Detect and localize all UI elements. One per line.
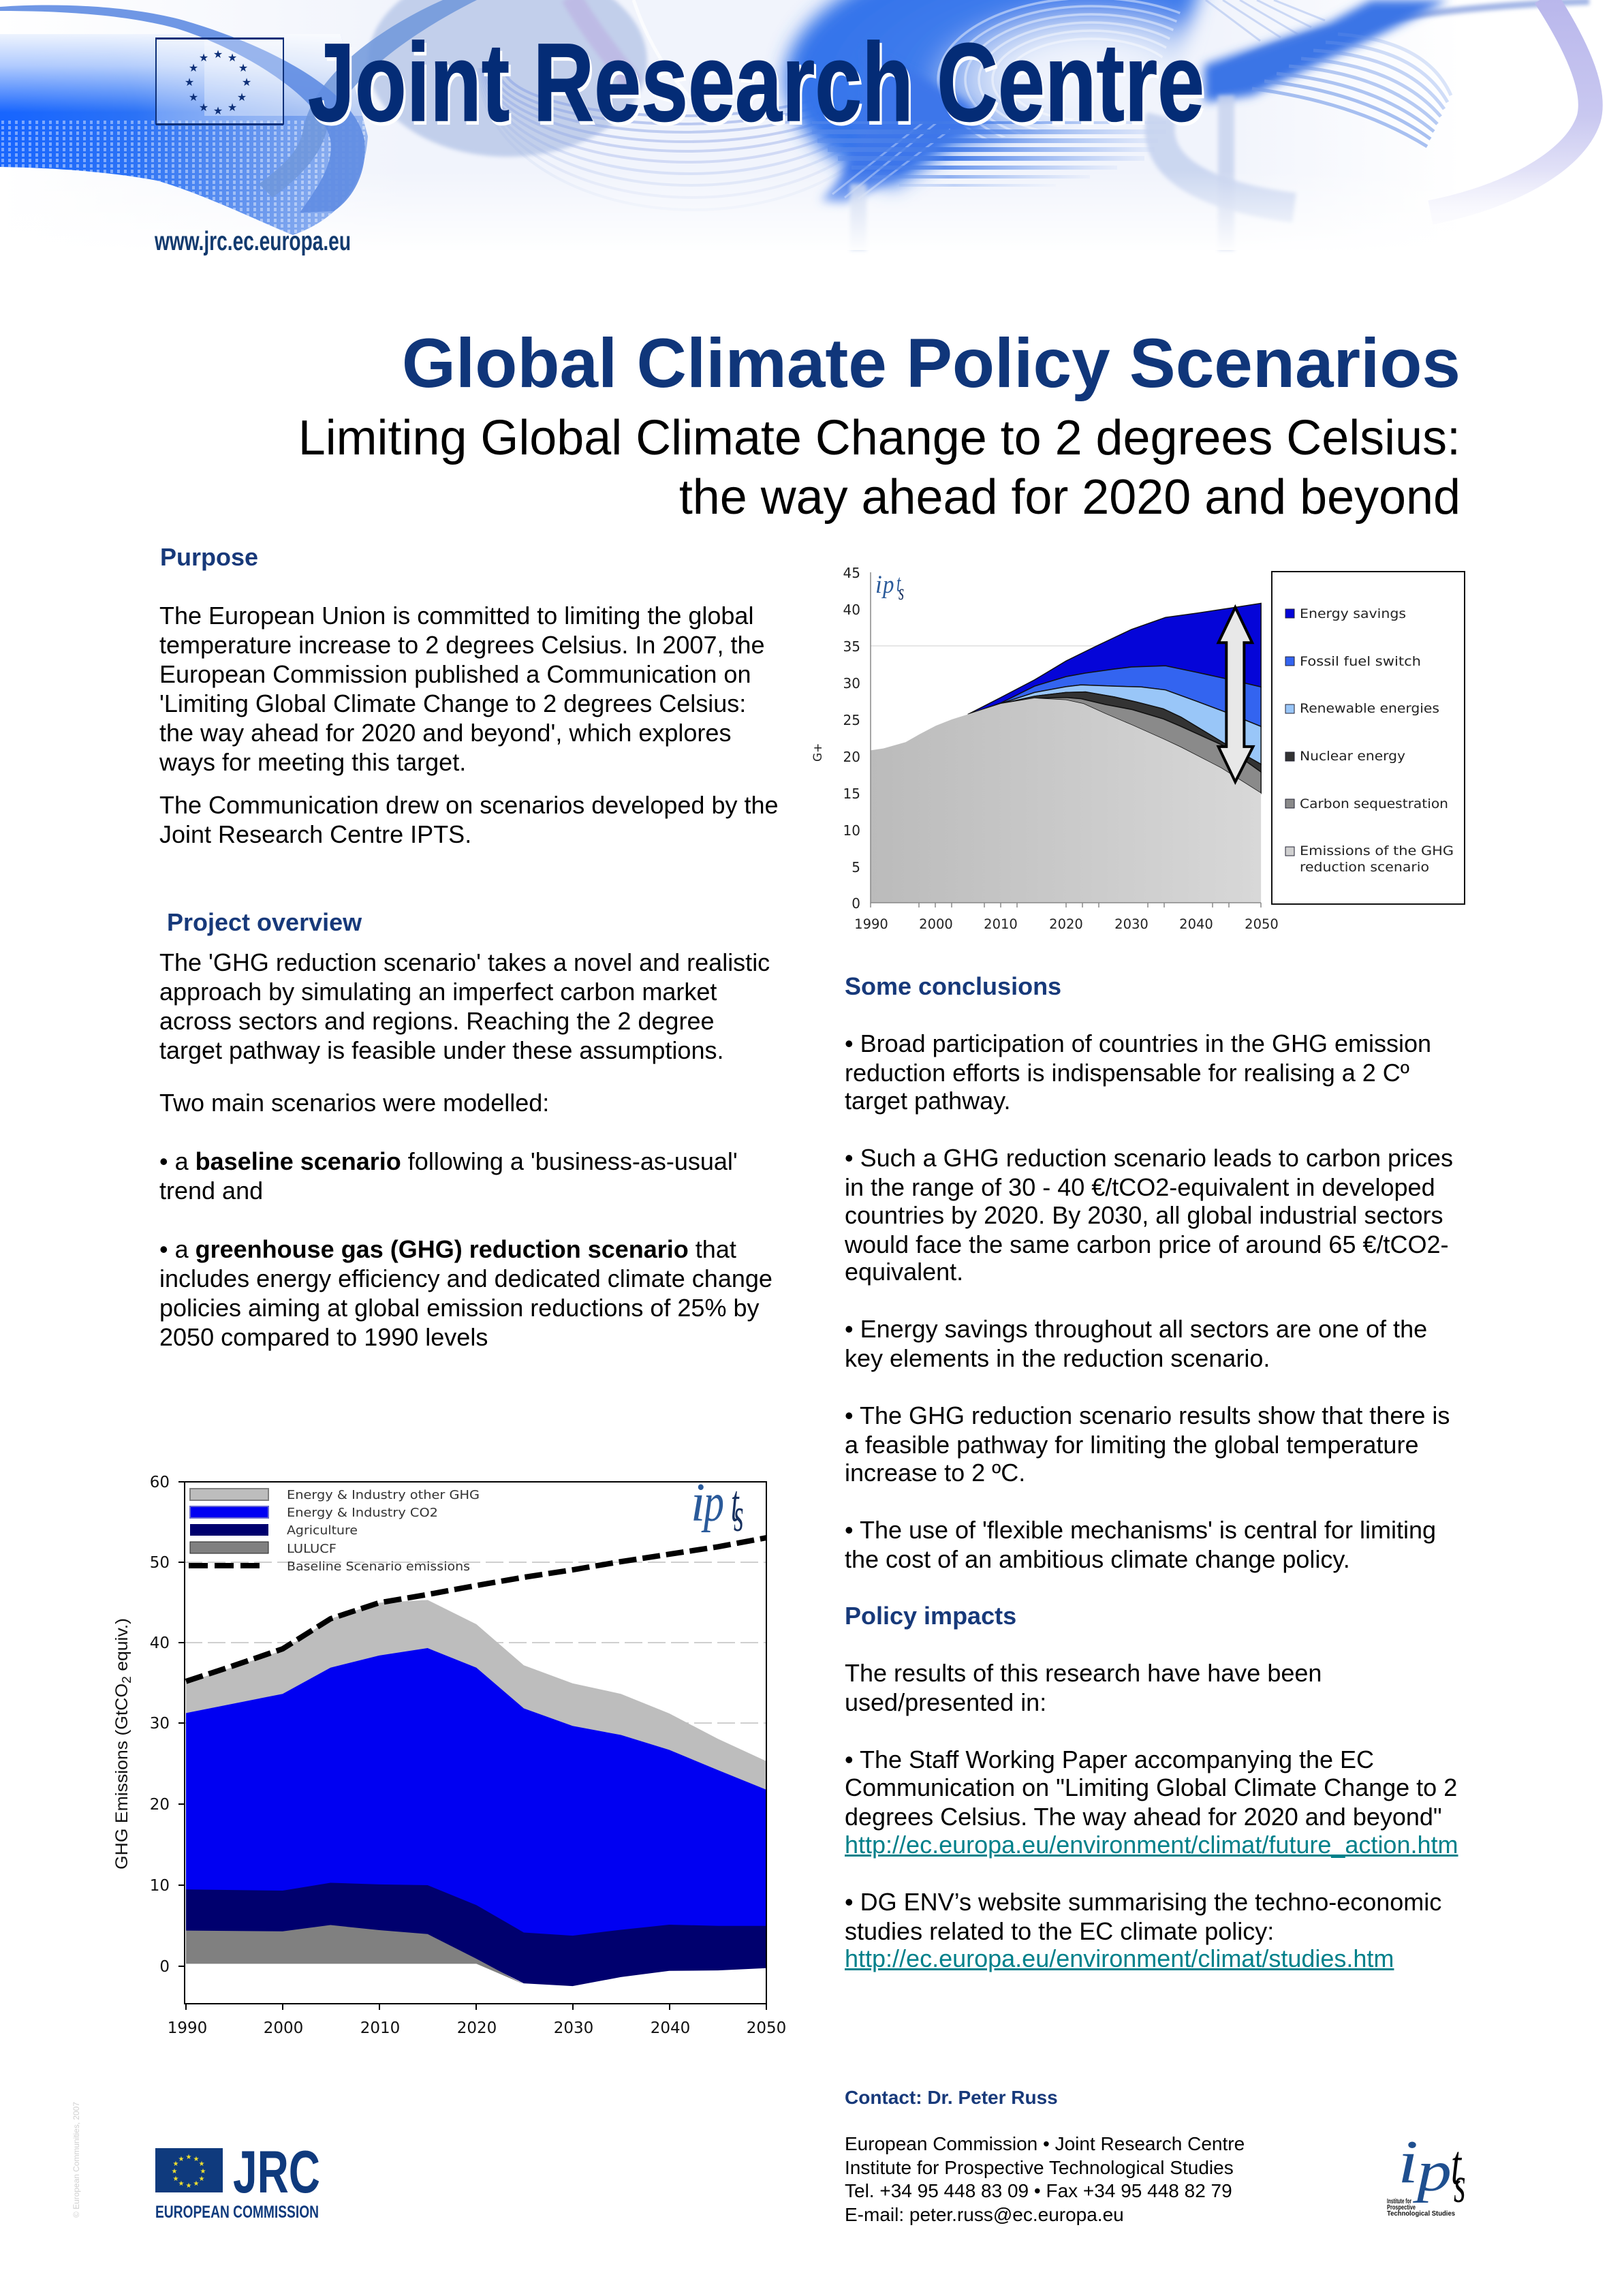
- contact details: European Commission • Joint Research Centre: [845, 2133, 1245, 2154]
- y axis labels: 10: [843, 822, 860, 839]
- y axis labels: 45: [843, 565, 860, 581]
- grid line at 35: [871, 645, 1097, 647]
- chart: GHG emissions stacked area: [112, 1472, 786, 2037]
- purple stripe middle: [571, 0, 634, 85]
- EU flag outline with stars: ★: [213, 104, 223, 117]
- text block: project overview: • a baseline scenario following a 'business-as-usual': [159, 1147, 738, 1175]
- text block: purpose: The European Union is committed to limiting the global: [159, 602, 753, 630]
- concentric arcs middle: [478, 68, 909, 210]
- website address: www.jrc.ec.europa.eu: [154, 227, 351, 256]
- heading: some conclusions: Some conclusions: [845, 972, 1061, 1000]
- x axis labels: 2030: [554, 2019, 593, 2037]
- x axis labels: 2000: [919, 916, 953, 932]
- x axis labels: 2040: [651, 2019, 690, 2037]
- legend box: reduction scenario: [1300, 860, 1429, 875]
- x axis labels: 2010: [360, 2019, 400, 2037]
- icon: ipts logo small: i: [875, 570, 882, 598]
- JRC logo: ★: [173, 2160, 179, 2168]
- text block: conclusions: • The GHG reduction scenario results show that there is: [845, 1401, 1450, 1429]
- text block: policy impacts: • The Staff Working Paper accompanying the EC: [845, 1746, 1374, 1773]
- x axis labels: 2000: [264, 2019, 303, 2037]
- EU flag outline with stars: ★: [213, 48, 223, 61]
- stacked areas: [186, 1600, 766, 1986]
- x axis labels: 2030: [1114, 916, 1149, 932]
- legend box: Energy savings: [1300, 606, 1406, 621]
- EU flag outline with stars: ★: [228, 51, 237, 64]
- title: Global Climate Policy Scenarios: [402, 324, 1461, 402]
- x axis labels: 1990: [854, 916, 888, 932]
- text block: project overview: trend and: [159, 1177, 263, 1205]
- text block: policy impacts: Communication on "Limiting Global Climate Change to 2: [845, 1773, 1457, 1801]
- text block: conclusions: in the range of 30 - 40 €/tCO2-equivalent in developed: [845, 1173, 1435, 1201]
- y axis labels: 0: [159, 1958, 170, 1976]
- Joint Research Centre wordmark: Joint Research Centre: [310, 23, 1206, 148]
- text block: policy impacts: used/presented in:: [845, 1688, 1046, 1716]
- EU flag outline with stars: ★: [199, 101, 208, 114]
- striped fan right: [1252, 34, 1451, 146]
- text block: purpose: 'Limiting Global Climate Change to 2 degrees Celsius:: [159, 689, 746, 717]
- text block: project overview: approach by simulating an imperfect carbon market: [159, 978, 717, 1006]
- x axis labels: 2010: [984, 916, 1018, 932]
- baseline scenario dashed line: [186, 1538, 766, 1681]
- text block: project overview: [159, 948, 772, 1351]
- x axis labels: [854, 916, 1279, 932]
- y axis labels: 20: [843, 749, 860, 765]
- icon: ipts logo: [691, 1472, 744, 1542]
- pale disc middle: [368, 0, 647, 157]
- JRC logo: ★: [178, 2180, 185, 2188]
- y axis labels: [843, 565, 860, 912]
- heading: project overview: Project overview: [167, 908, 362, 936]
- JRC logo: ★: [172, 2168, 178, 2175]
- y axis labels: 60: [150, 1474, 170, 1491]
- IPTS logo: Institute for: [1387, 2198, 1411, 2205]
- x axis labels: [168, 2019, 786, 2037]
- text block: project overview: across sectors and regions. Reaching the 2 degree: [159, 1007, 714, 1035]
- icon: ipts logo small: t: [896, 570, 901, 597]
- y axis labels: [150, 1474, 170, 1976]
- header banner: [0, 0, 1603, 256]
- blue fan lower centre: [821, 48, 984, 203]
- x axis labels: 2020: [1049, 916, 1083, 932]
- y axis labels: 0: [852, 895, 860, 912]
- grid lines: [185, 1562, 766, 1723]
- EU flag outline with stars: ★: [185, 76, 194, 89]
- top centre blue ring: [770, 0, 1214, 200]
- legend: [189, 1488, 480, 1574]
- text block: policy impacts: The results of this research have have been: [845, 1659, 1322, 1687]
- text block: project overview: target pathway is feasible under these assumptions.: [159, 1036, 723, 1064]
- text block: conclusions: a feasible pathway for limiting the global temperature: [845, 1431, 1418, 1459]
- icon: ipts logo: s: [734, 1489, 744, 1542]
- EU flag outline with stars: ★: [199, 51, 208, 64]
- y axis labels: 40: [150, 1634, 170, 1652]
- diagonal blue band right: [1204, 0, 1449, 102]
- text block: purpose: the way ahead for 2020 and beyond', which explores: [159, 719, 731, 747]
- text block: purpose: temperature increase to 2 degrees Celsius. In 2007, the: [159, 631, 765, 659]
- white concentric lines: [937, 0, 1181, 139]
- text block: conclusions: would face the same carbon price of around 65 €/tCO2-: [845, 1230, 1448, 1258]
- text block: project overview: 2050 compared to 1990 levels: [159, 1323, 488, 1351]
- text block: conclusions: key elements in the reduction scenario.: [845, 1344, 1270, 1372]
- x axis labels: 1990: [168, 2019, 207, 2037]
- stacked wedge areas: [871, 604, 1261, 903]
- y axis title: equiv.): [112, 1618, 131, 1676]
- JRC logo: [155, 2146, 320, 2221]
- y axis labels: 5: [852, 859, 860, 875]
- IPTS logo: [1387, 2136, 1466, 2218]
- y axis labels: 40: [843, 602, 860, 618]
- legend box: Carbon sequestration: [1300, 796, 1448, 811]
- EU flag outline with stars: ★: [237, 91, 247, 104]
- chart: emission reduction wedges: [811, 565, 1465, 932]
- text block: purpose: ways for meeting this target.: [159, 748, 466, 776]
- text block: conclusions: • Energy savings throughout all sectors are one of the: [845, 1315, 1427, 1343]
- text block: project overview: • a greenhouse gas (GHG) reduction scenario that: [159, 1235, 736, 1263]
- IPTS logo: Prospective: [1387, 2204, 1416, 2212]
- text block: purpose: European Commission published a Communication on: [159, 660, 751, 688]
- JRC logo: ★: [199, 2175, 205, 2183]
- plot frame and ticks: [178, 1482, 766, 2010]
- text block: conclusions: • The use of 'flexible mechanisms' is central for limiting: [845, 1516, 1436, 1544]
- IPTS logo: s: [1454, 2158, 1466, 2214]
- purple stripe right: [1431, 0, 1591, 213]
- text block: conclusions: equivalent.: [845, 1258, 963, 1286]
- copyright note: © European Communities, 2007: [72, 2102, 81, 2218]
- text block: project overview: policies aiming at global emission reductions of 25% by: [159, 1294, 759, 1322]
- JRC logo: ★: [178, 2156, 185, 2163]
- legend box: Renewable energies: [1300, 701, 1439, 716]
- y axis labels: 50: [150, 1554, 170, 1572]
- y axis labels: 25: [843, 712, 860, 728]
- axes and ticks: [871, 572, 1261, 907]
- heading: purpose: Purpose: [160, 543, 258, 571]
- x axis labels: 2050: [1245, 916, 1279, 932]
- text block: purpose: [159, 602, 779, 848]
- y axis title: 2: [120, 1676, 134, 1684]
- text block: conclusions: target pathway.: [845, 1087, 1010, 1115]
- IPTS logo: p: [1412, 2139, 1452, 2203]
- legend: LULUCF: [287, 1542, 337, 1556]
- JRC logo: ★: [200, 2168, 206, 2175]
- EU flag outline with stars: [156, 37, 283, 125]
- EU flag outline with stars: ★: [189, 61, 198, 74]
- text block: policy impacts: http://ec.europa.eu/environment/climat/studies.htm: [845, 1944, 1394, 1972]
- contact details: E-mail: peter.russ@ec.europa.eu: [845, 2203, 1124, 2225]
- x axis labels: 2020: [457, 2019, 497, 2037]
- heading: policy impacts: Policy impacts: [845, 1602, 1016, 1630]
- text block: conclusions: • Such a GHG reduction scenario leads to carbon prices: [845, 1144, 1453, 1172]
- JRC logo: ★: [193, 2180, 200, 2188]
- JRC logo: ★: [186, 2154, 192, 2161]
- subtitle: [298, 411, 1461, 525]
- legend: Agriculture: [287, 1523, 358, 1538]
- y axis labels: 30: [843, 675, 860, 692]
- JRC logo: ★: [186, 2182, 192, 2190]
- text block: project overview: Two main scenarios were modelled:: [159, 1089, 549, 1117]
- y axis fragment: G+: [811, 743, 825, 762]
- text block: conclusions: [845, 1029, 1453, 1573]
- text block: purpose: The Communication drew on scenarios developed by the: [159, 791, 779, 819]
- text block: conclusions: • Broad participation of countries in the GHG emission: [845, 1029, 1431, 1057]
- JRC logo: ★: [199, 2160, 205, 2168]
- EU flag outline with stars: ★: [228, 101, 237, 114]
- legend box: Emissions of the GHG: [1300, 843, 1454, 858]
- big arc right: [1216, 1, 1589, 74]
- y axis labels: 20: [150, 1796, 170, 1814]
- left blue mass: [0, 34, 368, 235]
- text block: project overview: includes energy efficiency and dedicated climate change: [159, 1265, 772, 1292]
- icon: ipts logo small: s: [899, 579, 904, 604]
- EU flag outline with stars: ★: [189, 91, 198, 104]
- text block: policy impacts: • DG ENV’s website summarising the techno-economic: [845, 1888, 1441, 1916]
- IPTS logo: Technological Studies: [1387, 2210, 1455, 2218]
- double arrow: [1219, 607, 1253, 782]
- icon: ipts logo small: [875, 570, 904, 604]
- text block: policy impacts: degrees Celsius. The way ahead for 2020 and beyond": [845, 1803, 1442, 1831]
- text block: conclusions: reduction efforts is indispensable for realising a 2 Cº: [845, 1059, 1409, 1087]
- icon: ipts logo: p: [701, 1473, 724, 1533]
- legend box: Fossil fuel switch: [1300, 654, 1421, 669]
- text block: policy impacts: http://ec.europa.eu/environment/climat/future_action.htm: [845, 1831, 1458, 1859]
- icon: ipts logo small: p: [881, 570, 894, 598]
- text block: purpose: Joint Research Centre IPTS.: [159, 820, 471, 848]
- y axis title: GHG Emissions (GtCO: [112, 1694, 131, 1870]
- pale vertical bands: [1218, 95, 1234, 250]
- contact heading: Contact: Dr. Peter Russ: [845, 2087, 1058, 2108]
- EU flag outline with stars: ★: [242, 76, 251, 89]
- icon: ipts logo: t: [731, 1475, 740, 1532]
- y axis labels: 30: [150, 1715, 170, 1733]
- text block: conclusions: the cost of an ambitious climate change policy.: [845, 1545, 1350, 1573]
- text block: policy impacts: [845, 1659, 1458, 1972]
- contact details: Tel. +34 95 448 83 09 • Fax +34 95 448 82 79: [845, 2180, 1232, 2201]
- Joint Research Centre wordmark: Joint Research Centre: [308, 20, 1204, 144]
- y axis labels: 15: [843, 786, 860, 802]
- text block: conclusions: countries by 2020. By 2030, all global industrial sectors: [845, 1201, 1443, 1229]
- y axis labels: 10: [150, 1877, 170, 1895]
- text block: conclusions: increase to 2 ºC.: [845, 1459, 1025, 1487]
- x axis labels: 2050: [747, 2019, 786, 2037]
- legend: Energy & Industry other GHG: [287, 1488, 480, 1502]
- text block: policy impacts: studies related to the EC climate policy:: [845, 1917, 1274, 1945]
- legend box: Nuclear energy: [1300, 749, 1405, 764]
- IPTS logo: t: [1451, 2136, 1462, 2197]
- legend box: [1272, 572, 1465, 904]
- legend: Baseline Scenario emissions: [287, 1560, 470, 1574]
- contact details: Institute for Prospective Technological Studies: [845, 2157, 1234, 2177]
- icon: ipts logo: i: [691, 1472, 705, 1532]
- legend: Energy & Industry CO2: [287, 1506, 438, 1520]
- JRC logo: ★: [193, 2156, 200, 2163]
- horizontal stripes: [812, 121, 1166, 187]
- x axis labels: 2040: [1179, 916, 1213, 932]
- subtitle: the way ahead for 2020 and beyond: [679, 470, 1461, 525]
- swoosh arcs over left mass: [259, 0, 477, 198]
- JRC logo: ★: [173, 2175, 179, 2183]
- y axis labels: 35: [843, 638, 860, 655]
- text block: project overview: The 'GHG reduction scenario' takes a novel and realistic: [159, 948, 770, 976]
- subtitle: Limiting Global Climate Change to 2 degrees Celsius:: [298, 411, 1461, 465]
- contact details: [845, 2133, 1245, 2225]
- EU flag outline with stars: ★: [238, 61, 248, 74]
